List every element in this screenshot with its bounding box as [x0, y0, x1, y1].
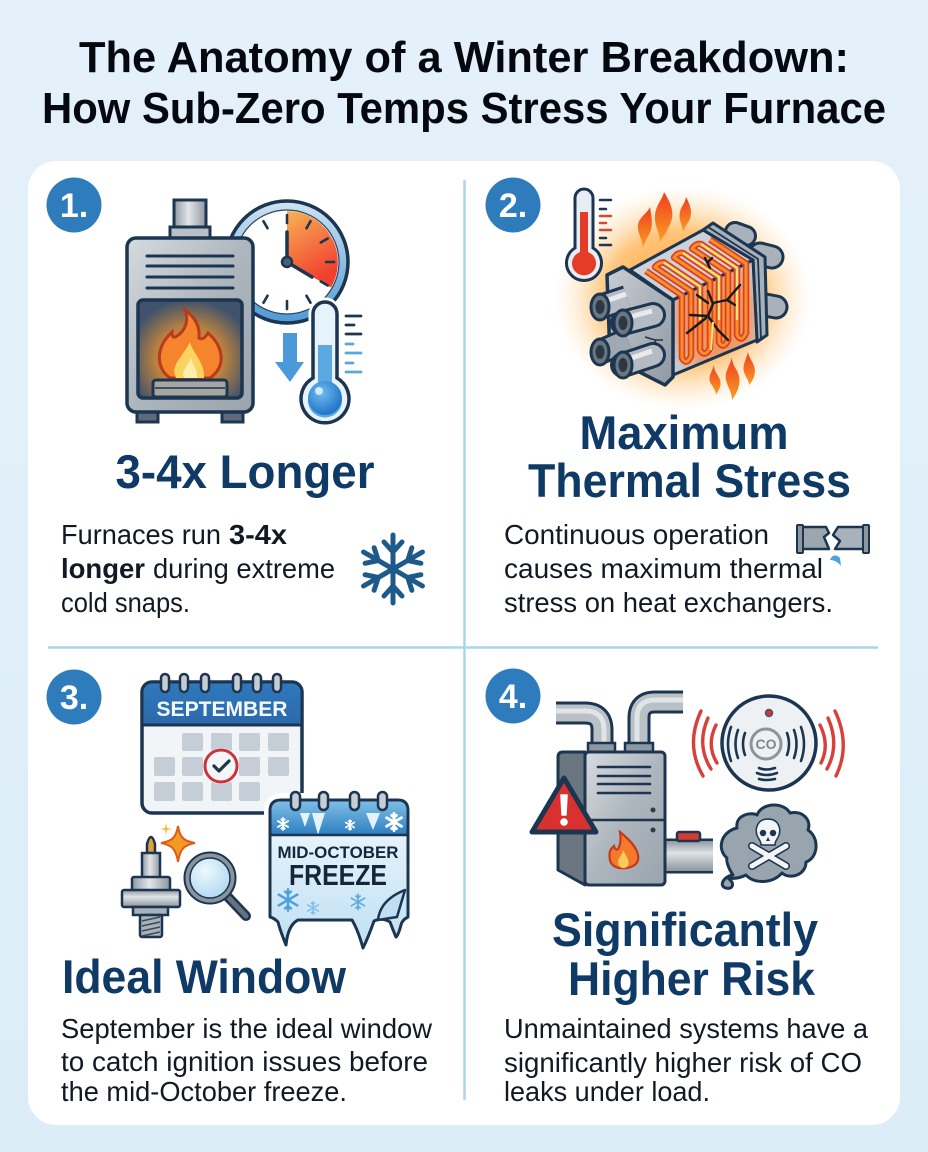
- number badge 2: 2.: [499, 187, 527, 225]
- icon: magnifying glass: [184, 852, 246, 916]
- text block: continuous operation: Continuous operation: [504, 519, 769, 550]
- icon: september calendar: [142, 674, 302, 813]
- icon: cracked heat exchanger: [591, 223, 776, 385]
- main white card: [28, 161, 900, 1125]
- panel: 3 ideal window: [46, 670, 433, 1107]
- icon: spark plug: [122, 837, 180, 937]
- text block: continuous operation: causes maximum thermal: [504, 553, 823, 584]
- icon: frozen mid-october calendar: FREEZE: [289, 860, 387, 892]
- icon: heat waves below: [709, 352, 755, 400]
- icon: furnace with vent pipes: [556, 700, 713, 885]
- icon: broken pipe: [797, 525, 869, 566]
- text block: unmaintained systems: significantly higher risk of CO: [504, 1047, 862, 1078]
- panel: 4 significantly higher risk: [486, 668, 868, 1107]
- icon: hot thermometer: [566, 189, 611, 281]
- text block: furnaces run longer: [61, 519, 335, 618]
- heading: Maximum Thermal Stress: [528, 406, 851, 507]
- icon: cold thermometer: [301, 302, 361, 423]
- panel: 1 longer run times: [46, 178, 427, 618]
- number badge 2: [486, 178, 540, 232]
- text block: furnaces run longer: Furnaces run: [61, 519, 221, 550]
- number badge 3: [46, 670, 102, 724]
- number badge 1: [46, 178, 102, 232]
- icon: CO detector with alarm waves: [693, 696, 843, 790]
- number badge 4: 4.: [499, 678, 527, 716]
- icon: september calendar: SEPTEMBER: [156, 698, 288, 721]
- number badge 4: [486, 668, 540, 724]
- icon: frozen mid-october calendar: MID-OCTOBER: [278, 843, 398, 862]
- heading: Maximum Thermal Stress: Maximum: [580, 406, 788, 459]
- heading: 3-4x Longer: 3-4x Longer: [116, 445, 374, 498]
- icon: down arrow: [275, 333, 304, 382]
- text block: furnaces run longer: 3-4x: [229, 519, 287, 550]
- icon: heat glow: [555, 186, 811, 410]
- number badge 1: 1.: [60, 187, 88, 225]
- panel: 2 maximum thermal stress: [486, 178, 869, 618]
- text block: September ideal window: [61, 1013, 433, 1107]
- heading: Maximum Thermal Stress: Thermal Stress: [528, 454, 851, 507]
- icon: snowflake: [359, 535, 427, 603]
- text block: unmaintained systems: [504, 1013, 868, 1107]
- icon: ignition spark: [160, 823, 195, 862]
- heading: Significantly Higher Risk: [552, 903, 818, 1005]
- title: The Anatomy of a Winter Breakdown:: [79, 33, 849, 82]
- title: How Sub-Zero Temps Stress Your Furnace: [42, 84, 886, 133]
- text block: furnaces run longer: longer: [61, 553, 145, 584]
- heading: Ideal Window: Ideal Window: [62, 950, 346, 1003]
- icon: toxic smoke cloud with skull: [721, 805, 816, 888]
- icon: frozen mid-october calendar: [264, 792, 414, 955]
- text block: furnaces run longer: cold snaps.: [61, 587, 190, 618]
- heading: Significantly Higher Risk: Higher Risk: [568, 952, 816, 1005]
- text block: continuous operation: stress on heat exchangers.: [504, 587, 833, 618]
- icon: furnace with flame: [127, 200, 253, 422]
- heading: Significantly Higher Risk: Significantly: [552, 903, 818, 956]
- text block: September ideal window: to catch ignition issues before: [61, 1046, 428, 1077]
- text block: September ideal window: September is the ideal window: [61, 1013, 433, 1044]
- text block: unmaintained systems: Unmaintained systems have a: [504, 1013, 868, 1044]
- icon: warning triangle: [532, 778, 596, 832]
- title: [42, 33, 886, 133]
- number badge 3: 3.: [60, 679, 88, 717]
- icon: clock with elapsed run time: [226, 201, 348, 323]
- text block: continuous operation: [504, 519, 833, 618]
- text block: September ideal window: the mid-October freeze.: [61, 1076, 347, 1107]
- text block: furnaces run longer: during extreme: [153, 553, 335, 584]
- text block: unmaintained systems: leaks under load.: [504, 1076, 710, 1107]
- icon: heat waves above: [638, 192, 691, 248]
- icon: CO detector with alarm waves: CO: [756, 736, 777, 752]
